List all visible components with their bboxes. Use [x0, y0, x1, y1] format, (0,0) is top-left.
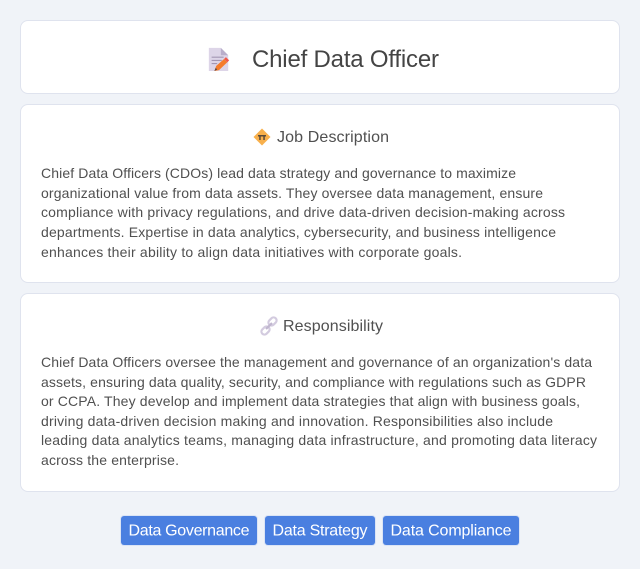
- text: responsibility body: or CCPA. They develop and implement data strategies that align with business goals,: [41, 393, 580, 409]
- text: responsibility body: across the enterprise.: [41, 452, 179, 468]
- heading: responsibility: Responsibility: [283, 318, 383, 335]
- tag: data compliance: [383, 516, 519, 545]
- panel: responsibility: [20, 293, 620, 492]
- heading: job description: Job Description: [277, 129, 389, 146]
- icon: chain link: [260, 316, 278, 336]
- tag: data strategy: [265, 516, 375, 545]
- text: job description body: enhances their ability to align data initiatives with corporate goals.: [41, 244, 462, 260]
- text: job description body: Chief Data Officers (CDOs) lead data strategy and governance to maximize: [41, 165, 516, 181]
- text: responsibility body: leading data analytics teams, managing data infrastructure, and promoting data literacy: [41, 432, 597, 448]
- text: responsibility body: driving data-driven decision making and innovation. Responsibilities also include: [41, 413, 553, 429]
- text: job description body: organizational value from data assets. They oversee data management, ensure: [41, 185, 543, 201]
- text: responsibility body: [41, 354, 597, 468]
- text: job description body: [41, 165, 565, 260]
- panel: job description: [20, 104, 620, 283]
- panel: title card: [20, 20, 620, 94]
- text: responsibility body: assets, ensuring data quality, security, and compliance with regulations such as GDPR: [41, 374, 586, 390]
- text: responsibility body: Chief Data Officers oversee the management and governance of an organization's data: [41, 354, 592, 370]
- tag: data governance: Data Governance: [128, 522, 250, 540]
- text: job description body: compliance with privacy regulations, and drive data-driven decision-making across: [41, 204, 565, 220]
- tag: data governance: [121, 516, 257, 545]
- tag: data strategy: Data Strategy: [272, 522, 368, 540]
- text: job description body: departments. Expertise in data analytics, cybersecurity, and business intelligence: [41, 224, 556, 240]
- icon: memo with pencil: [208, 48, 230, 71]
- title: Chief Data Officer: [252, 46, 439, 73]
- tag: data compliance: Data Compliance: [390, 522, 512, 540]
- icon: construction diamond: [254, 128, 270, 146]
